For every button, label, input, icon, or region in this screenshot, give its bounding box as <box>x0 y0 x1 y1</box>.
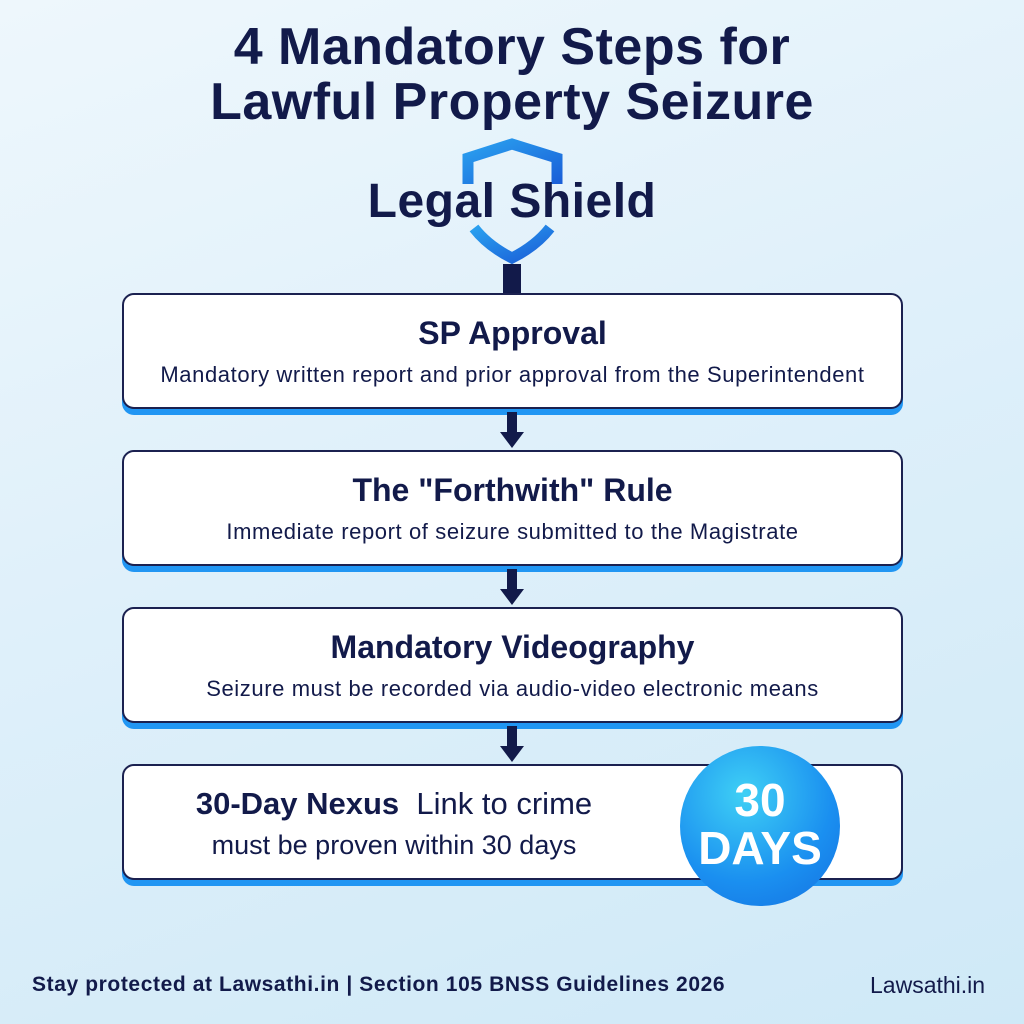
arrow 3 <box>500 726 524 762</box>
arrow 1 <box>500 412 524 448</box>
step 4 text <box>196 786 592 860</box>
step 2: The "Forthwith" Rule <box>352 472 673 508</box>
badge: 30 days: 30 <box>734 774 786 826</box>
step 4 text: 30-Day Nexus Link to crime <box>196 786 592 821</box>
title: 4 Mandatory Steps for <box>234 18 790 76</box>
connector line <box>503 264 521 294</box>
step 1: Mandatory written report and prior approval from the Superintendent <box>160 362 865 387</box>
badge: 30 days: DAYS <box>698 822 822 874</box>
step 1 <box>122 293 903 409</box>
step 3: Seizure must be recorded via audio-video electronic means <box>206 676 819 701</box>
step 2: Immediate report of seizure submitted to the Magistrate <box>226 519 799 544</box>
icon: shield <box>462 138 562 264</box>
step 2 <box>122 450 903 566</box>
arrow 2 <box>500 569 524 605</box>
step 4 text: must be proven within 30 days <box>212 830 576 860</box>
step 3: Mandatory Videography <box>331 629 694 665</box>
step 3 <box>122 607 903 723</box>
step 1: SP Approval <box>418 315 607 351</box>
title <box>210 18 814 131</box>
badge: 30 days <box>680 746 840 906</box>
step 4 <box>122 764 903 880</box>
title: Lawful Property Seizure <box>210 73 814 131</box>
footer left: Stay protected at Lawsathi.in | Section 105 BNSS Guidelines 2026 <box>32 973 725 996</box>
footer right: Lawsathi.in <box>870 972 985 998</box>
heading: Legal Shield: Legal Shield <box>368 175 656 228</box>
